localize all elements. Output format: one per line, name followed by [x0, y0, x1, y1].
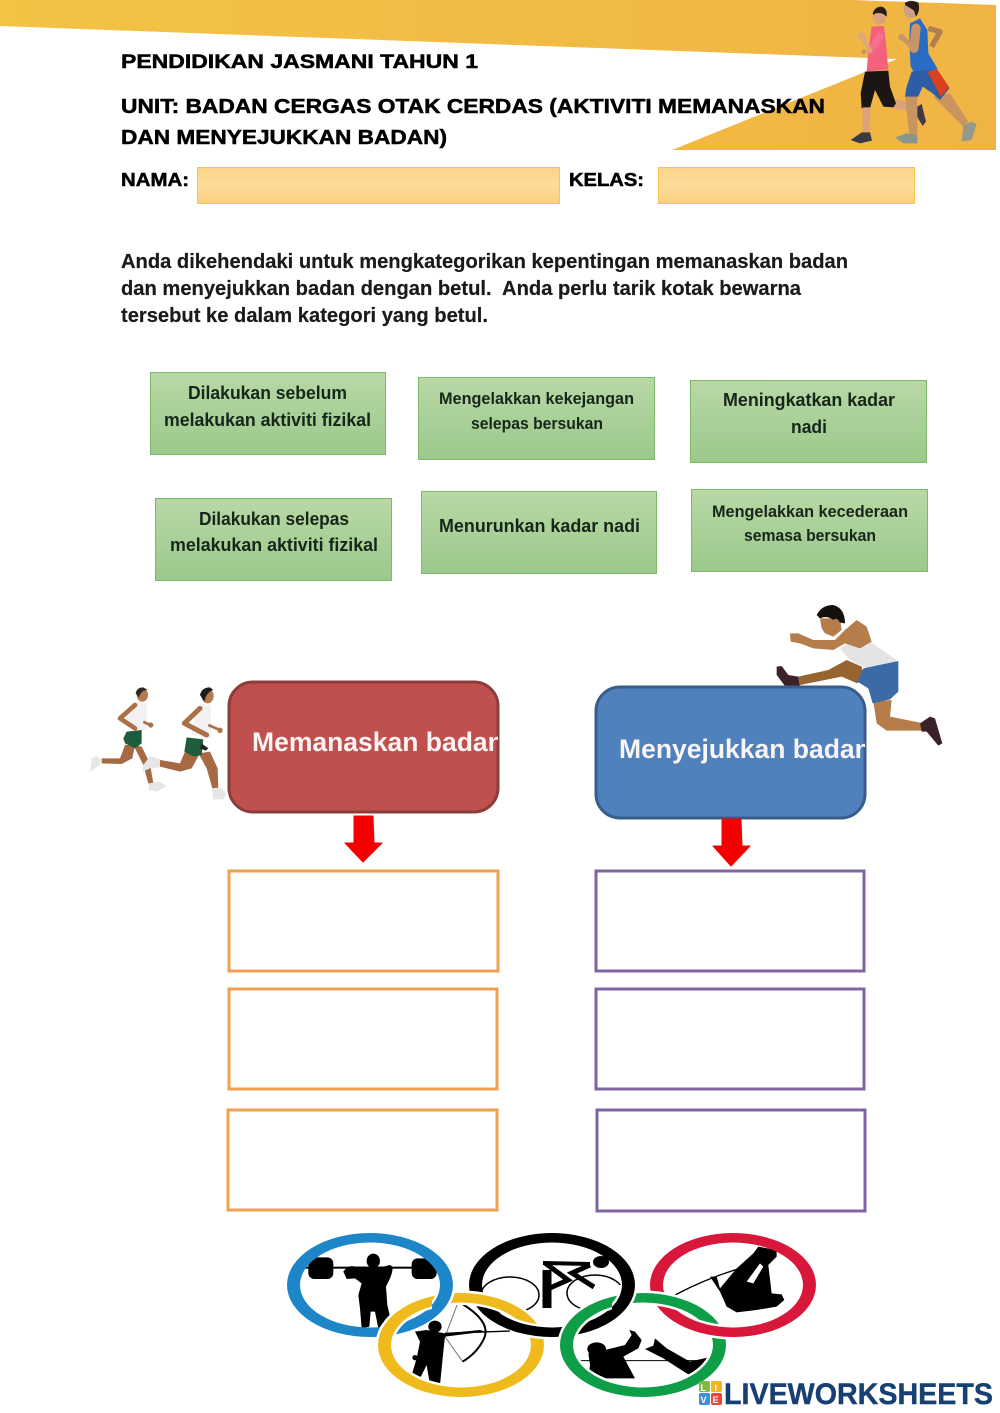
icon: two runners	[90, 687, 227, 799]
answer box: cool down 1	[596, 871, 864, 971]
card: after activity: melakukan aktiviti fizikal	[170, 535, 378, 555]
answer box: warm up 2	[229, 989, 497, 1089]
label: class: KELAS:	[569, 170, 644, 190]
ring: green	[560, 1293, 726, 1397]
instructions: Anda dikehendaki untuk mengkategorikan kepentingan memanaskan badan	[121, 251, 848, 273]
ring: blue	[287, 1233, 453, 1337]
ring crossing: black over green	[612, 1285, 636, 1310]
card: raise pulse: nadi	[791, 417, 827, 437]
card: before activity	[150, 372, 386, 454]
ring: black	[469, 1233, 635, 1337]
ring crossing: blue over yellow	[432, 1290, 454, 1312]
logo: liveworksheets: LIVEWORKSHEETS	[724, 1378, 993, 1411]
logo: liveworksheets: L	[700, 1383, 706, 1393]
card: raise pulse	[690, 380, 926, 462]
ring crossing: red over green	[698, 1320, 735, 1340]
card: lower pulse: Menurunkan kadar nadi	[439, 516, 640, 536]
input: name	[198, 168, 560, 204]
card: avoid injury: Mengelakkan kecederaan	[712, 502, 908, 521]
silhouette: cyclist	[481, 1256, 623, 1313]
heading: unit: DAN MENYEJUKKAN BADAN)	[121, 127, 447, 149]
ring: red	[650, 1233, 816, 1337]
box: warm up header	[229, 682, 504, 812]
card: lower pulse	[422, 492, 656, 574]
icon: man runner	[895, 1, 977, 143]
box: warm up header: Memanaskan badan	[252, 727, 504, 757]
card: raise pulse: Meningkatkan kadar	[723, 390, 895, 410]
heading: subject: PENDIDIKAN JASMANI TAHUN 1	[121, 51, 478, 73]
answer box: cool down 2	[596, 989, 864, 1089]
silhouette: pole vaulter	[675, 1247, 784, 1312]
card: avoid cramps: Mengelakkan kekejangan	[439, 389, 634, 408]
card: after activity	[156, 498, 392, 580]
card: after activity: Dilakukan selepas	[199, 509, 349, 529]
logo: liveworksheets: V	[700, 1395, 707, 1405]
answer box: cool down 3	[597, 1110, 865, 1211]
card: avoid cramps: selepas bersukan	[471, 414, 603, 433]
answer box: warm up 3	[228, 1110, 497, 1210]
runner two	[142, 687, 227, 799]
instructions	[121, 251, 848, 327]
runner one	[90, 687, 167, 792]
card: avoid injury	[692, 490, 928, 572]
answer box: warm up 1	[229, 871, 498, 971]
box: cool down header	[596, 687, 871, 818]
heading: unit	[121, 96, 825, 149]
label: name: NAMA:	[121, 170, 189, 190]
ring crossing: black over yellow	[515, 1318, 555, 1340]
heading: unit: UNIT: BADAN CERGAS OTAK CERDAS (AKTIVITI MEMANASKAN	[121, 96, 825, 118]
arrow: cool down	[713, 819, 750, 866]
card: before activity: Dilakukan sebelum	[188, 383, 347, 403]
ring: yellow	[378, 1293, 544, 1397]
arrow: warm up	[345, 816, 382, 862]
box: cool down header: Menyejukkan badan	[619, 734, 871, 764]
header banner	[0, 0, 996, 150]
olympic rings with sports silhouettes	[287, 1233, 816, 1397]
instructions: tersebut ke dalam kategori yang betul.	[121, 305, 488, 327]
card: avoid cramps	[418, 378, 654, 460]
card: before activity: melakukan aktiviti fizikal	[164, 410, 371, 430]
silhouette: volleyball	[575, 1330, 708, 1378]
logo: liveworksheets: E	[712, 1395, 719, 1405]
icon: woman runner	[851, 7, 926, 143]
silhouette: archer	[412, 1302, 510, 1385]
input: class	[658, 168, 914, 204]
instructions: dan menyejukkan badan dengan betul. Anda perlu tarik kotak bewarna	[121, 278, 802, 300]
silhouette: weightlifter	[305, 1254, 440, 1328]
card: avoid injury: semasa bersukan	[744, 526, 876, 545]
logo: liveworksheets: I	[714, 1383, 717, 1393]
icon: hurdler	[777, 605, 942, 746]
